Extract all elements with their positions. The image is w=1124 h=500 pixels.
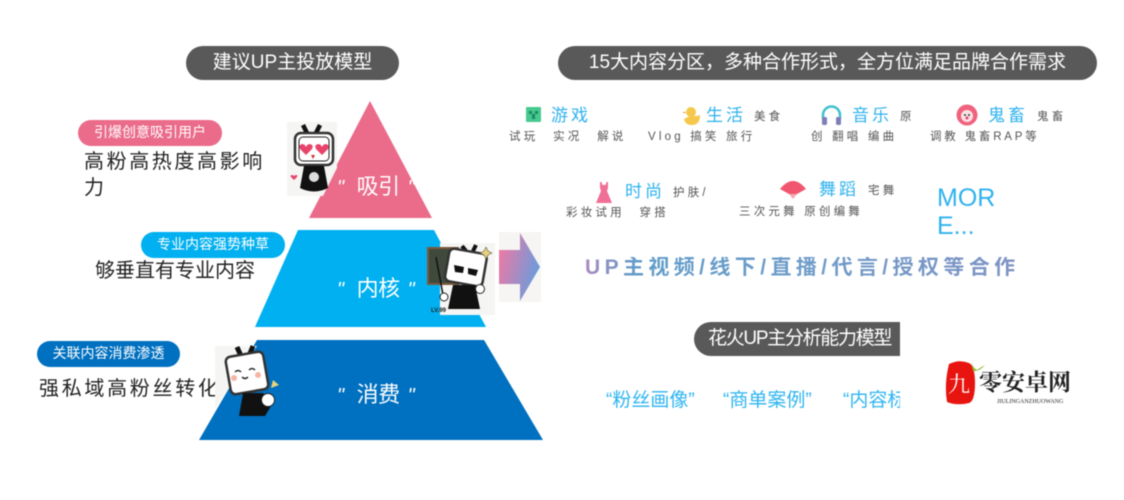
category subtitle: 调教 鬼畜RAP等 [930, 131, 1040, 143]
icon: mascot with pointer [426, 242, 494, 316]
logo: watermark [945, 360, 1071, 406]
arrow: gradient pointing right [498, 232, 541, 302]
icon: pink lion [956, 104, 978, 126]
text: analysis items, clipped [606, 389, 901, 411]
category subtitle: 创 翻唱 编曲 [811, 131, 897, 143]
category name: 鬼畜 [988, 106, 1028, 125]
text: core description: 够垂直有专业内容 [95, 260, 255, 282]
heading: analysis model: 花火UP主分析能力模型 [708, 328, 891, 349]
heading: content zones: 15大内容分区，多种合作形式，全方位满足品牌合作需求 [589, 52, 1066, 73]
tag: core: 专业内容强势种草 [157, 236, 269, 252]
icon: red badge with leaf: 九 [948, 368, 970, 399]
category note: 原 [900, 111, 915, 123]
heading: investment model: 建议UP主投放模型 [213, 52, 372, 73]
text: cooperation forms: UP主视频/线下/直播/代言/授权等合作 [585, 256, 1020, 279]
icon: mascot with pointer: LV.99 [431, 308, 447, 314]
pyramid tier: attract [309, 101, 432, 218]
icon: pink dress [596, 181, 612, 204]
icon: fan [780, 180, 806, 200]
category: games [509, 106, 627, 143]
text: attract description: 高粉高热度高影响力 [84, 151, 265, 199]
tier label: consume: " 消费 " [337, 382, 414, 407]
category note: 宅舞 [868, 185, 897, 197]
icon: mascot with heart eyes [288, 122, 338, 197]
category name: 音乐 [852, 106, 892, 125]
category: kichiku [930, 104, 1066, 143]
icon: red badge with leaf [945, 360, 985, 406]
category subtitle: 试玩 实况 解说 [509, 131, 627, 143]
item: business cases: “商单案例” [723, 390, 812, 411]
category name: 时尚 [625, 182, 665, 201]
category subtitle: Vlog 搞笑 旅行 [648, 131, 755, 143]
item: fan profile: “粉丝画像” [606, 390, 695, 411]
tag: core [141, 232, 285, 258]
logo name: 零安卓网 [979, 370, 1071, 395]
text: more: MORE... [937, 184, 995, 240]
category: music [810, 104, 915, 143]
icon: headphones [821, 104, 842, 126]
category: fashion [566, 181, 709, 219]
category subtitle: 三次元舞 原创编舞 [739, 206, 863, 218]
icon: duck [682, 106, 701, 126]
category: dance [739, 180, 897, 218]
category name: 舞蹈 [819, 180, 859, 199]
heading: investment model [186, 46, 399, 80]
tag: consume: 关联内容消费渗透 [52, 345, 164, 361]
icon: green creeper [525, 106, 542, 123]
category note: 鬼畜 [1037, 111, 1066, 123]
tag: attract: 引爆创意吸引用户 [94, 124, 206, 140]
text: consume description: 强私域高粉丝转化 [39, 378, 221, 400]
category: life [648, 106, 783, 144]
tag: consume [37, 341, 180, 367]
category note: 美食 [754, 111, 783, 123]
category name: 游戏 [551, 106, 591, 125]
pyramid tier: core [255, 230, 486, 327]
tier label: core: " 内核 " [337, 276, 414, 301]
logo pinyin: JIULINGANZHUOWANG [997, 399, 1063, 405]
pyramid tier: consume [199, 340, 543, 440]
heading: content zones [558, 46, 1097, 80]
category subtitle: 彩妆试用 穿搭 [566, 207, 669, 219]
tier label: attract: " 吸引 " [337, 174, 414, 199]
icon: mascot thumbs up [214, 344, 280, 417]
category name: 生活 [706, 106, 746, 125]
tag: attract [78, 120, 222, 146]
category note: 护肤/ [673, 187, 709, 199]
